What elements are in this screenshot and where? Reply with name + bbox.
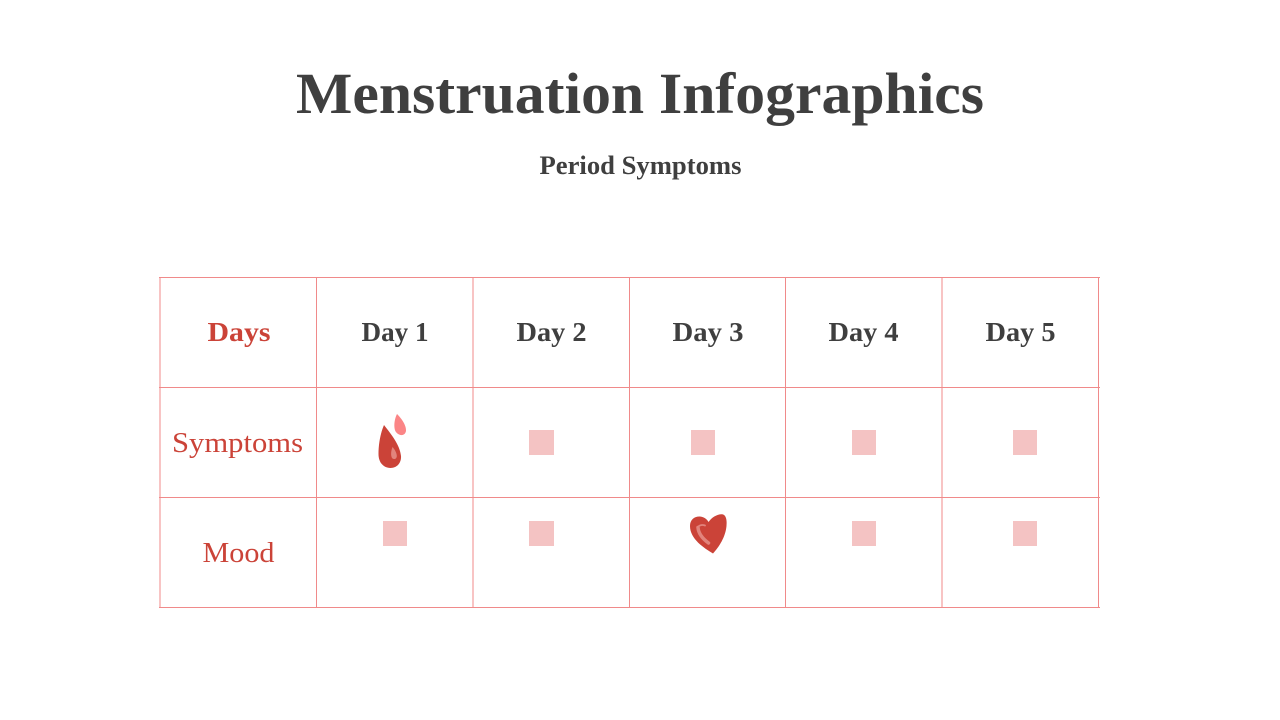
column header: Day 3: Day 3: [672, 317, 744, 347]
column header: Day 4: Day 4: [828, 317, 898, 347]
title: Menstruation Infographics: [296, 61, 984, 126]
row label: Mood: Mood: [202, 537, 275, 569]
column header: Day 2: Day 2: [516, 317, 586, 347]
column header: Day 1: Day 1: [362, 317, 428, 347]
placeholder square: Symptoms Day 2: [529, 430, 554, 455]
icon: heart: [690, 514, 727, 554]
placeholder square: Symptoms Day 3: [691, 430, 715, 455]
placeholder square: Mood Day 1: [383, 521, 407, 546]
icon: blood drops: [378, 414, 406, 468]
placeholder square: Mood Day 5: [1013, 521, 1037, 546]
table grid: [159, 277, 1100, 608]
table: [159, 277, 1100, 608]
column header: Day 5: Day 5: [986, 317, 1056, 347]
placeholder square: Symptoms Day 5: [1013, 430, 1037, 455]
subtitle: Period Symptoms: [540, 151, 742, 180]
row header: Days: Days: [208, 317, 270, 347]
row label: Symptoms: Symptoms: [172, 427, 303, 459]
placeholder square: Mood Day 4: [852, 521, 876, 546]
placeholder square: Symptoms Day 4: [852, 430, 876, 455]
placeholder square: Mood Day 2: [529, 521, 554, 546]
